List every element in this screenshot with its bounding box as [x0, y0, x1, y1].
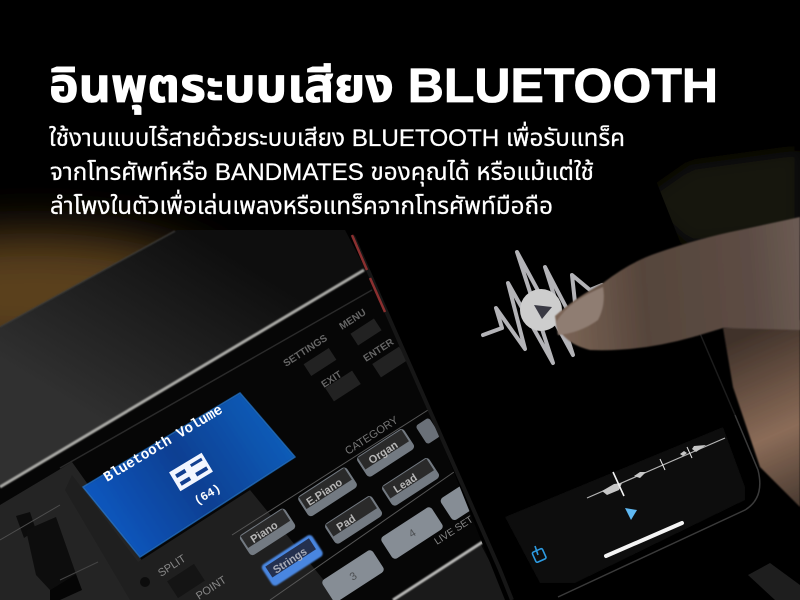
play button, blue	[625, 508, 637, 520]
panel labels: SPLIT	[156, 553, 189, 580]
hand	[555, 217, 800, 507]
volume value icon	[169, 453, 213, 491]
panel labels: EXIT	[320, 369, 344, 391]
fader	[0, 505, 98, 600]
keyboard top surface	[0, 230, 366, 487]
lower waveform	[587, 438, 725, 498]
fingernail	[556, 287, 604, 335]
title: อินพุตระบบเสียง BLUETOOTH	[49, 60, 718, 115]
category divider lines	[232, 410, 454, 600]
category buttons: Organ	[367, 439, 401, 467]
number buttons: 4	[407, 527, 418, 541]
silver lower edge and grey base	[393, 543, 510, 600]
panel small buttons	[167, 319, 408, 598]
bottom right background block	[748, 563, 800, 600]
waveform logo	[483, 252, 602, 363]
panel labels: LIVE SET	[433, 514, 475, 548]
body line 1: ใช้งานแบบไร้สายด้วยระบบเสียง BLUETOOTH เพื่อรับแทร็ค	[49, 121, 625, 152]
bottom player panel	[505, 427, 745, 583]
glow behind keyboard	[0, 233, 225, 357]
category buttons: Piano	[249, 519, 281, 546]
body text	[49, 121, 625, 220]
panel labels: CATEGORY	[343, 414, 401, 458]
keyboard back edge highlight	[0, 231, 175, 327]
category buttons: Pad	[335, 513, 358, 534]
phone bezel edge	[353, 236, 512, 600]
category buttons: Strings	[271, 546, 309, 576]
finger	[555, 217, 800, 350]
body line 3: ลำโพงในตัวเพื่อเล่นเพลงหรือแทร็คจากโทรศัพท์มือถือ	[50, 189, 553, 220]
panel labels: SETTINGS	[282, 333, 330, 370]
panel labels: MENU	[338, 307, 368, 333]
red trim strips	[352, 235, 385, 312]
control panel	[0, 270, 520, 600]
number buttons: 3	[348, 570, 359, 584]
hand back, dim	[640, 150, 800, 245]
panel labels: ENTER	[362, 336, 397, 365]
palm	[723, 320, 800, 507]
panel labels	[156, 307, 475, 600]
category buttons: E.Piano	[304, 476, 345, 509]
share icon	[532, 546, 546, 563]
body line 2: จากโทรศัพท์หรือ BANDMATES ของคุณได้ หรือแม้แต่ใช้	[50, 158, 594, 187]
value label: (64)	[192, 482, 224, 508]
screen title: Bluetooth Volume	[101, 403, 226, 486]
metal panel	[0, 462, 170, 600]
home indicator	[606, 523, 682, 556]
LCD screen	[83, 393, 295, 557]
keyboard	[0, 230, 520, 600]
smartphone	[345, 140, 770, 600]
silver front edge	[0, 270, 364, 487]
category buttons	[238, 417, 441, 587]
phone body	[345, 140, 770, 600]
category buttons: Lead	[392, 472, 420, 496]
number buttons	[321, 484, 477, 600]
